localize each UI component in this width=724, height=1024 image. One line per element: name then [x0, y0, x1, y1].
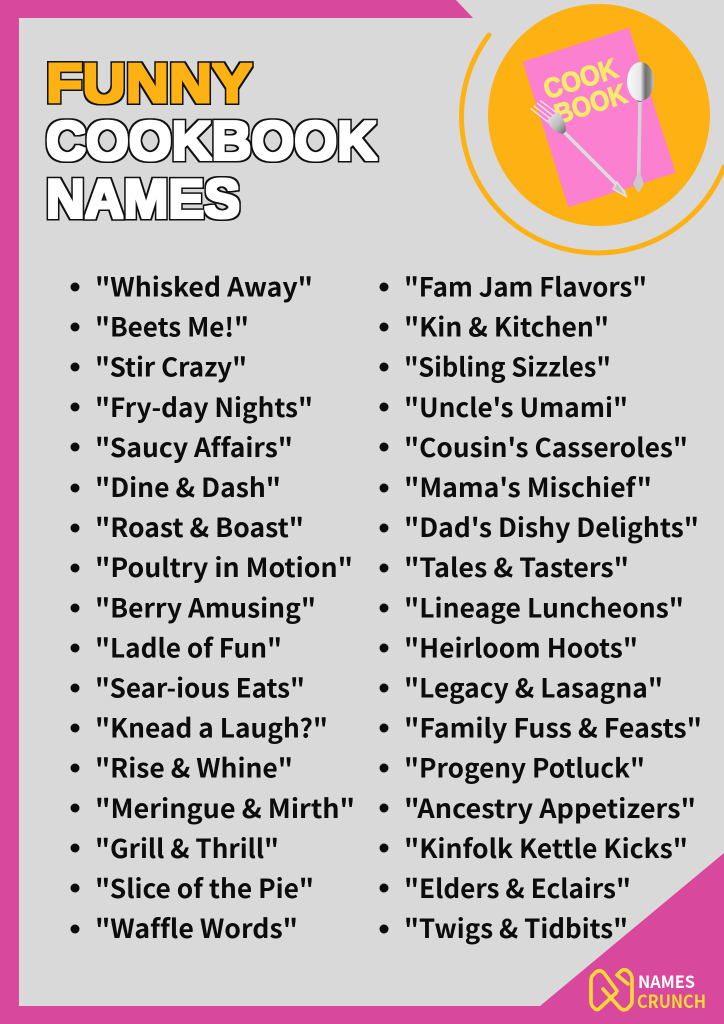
- item: "Ladle of Fun": [95, 628, 282, 665]
- orange circle: [488, 4, 710, 226]
- item: "Waffle Words": [95, 909, 298, 946]
- item: "Dad's Dishy Delights": [404, 508, 699, 545]
- item: "Heirloom Hoots": [404, 628, 638, 665]
- logo wordmark: Crunch: CRUNCH: [637, 988, 706, 1014]
- icon: N monogram: [591, 970, 632, 1010]
- title line: Funny: FUNNY: [46, 52, 252, 114]
- item: "Saucy Affairs": [95, 428, 293, 465]
- item: "Stir Crazy": [95, 348, 247, 385]
- icon: spoon: [627, 62, 654, 193]
- item: "Slice of the Pie": [95, 869, 314, 906]
- item: "Cousin's Casseroles": [404, 428, 688, 465]
- item: "Rise & Whine": [95, 749, 293, 786]
- item: "Tales & Tasters": [404, 548, 629, 585]
- orange ring arc: [462, 35, 724, 253]
- icon: cookbook illustration: [462, 4, 724, 253]
- item: "Fry-day Nights": [95, 388, 313, 425]
- item: "Sear-ious Eats": [95, 668, 305, 706]
- item: "Knead a Laugh?": [95, 709, 328, 746]
- list: left column: [70, 268, 355, 946]
- title line: Cookbook: COOKBOOK: [46, 110, 377, 172]
- item: "Whisked Away": [95, 268, 313, 304]
- item: "Ancestry Appetizers": [404, 789, 696, 826]
- item: "Beets Me!": [95, 308, 249, 345]
- logo wordmark: Names: NAMES: [638, 968, 695, 993]
- item: "Sibling Sizzles": [404, 348, 611, 385]
- item: "Kin & Kitchen": [404, 308, 609, 345]
- item: "Grill & Thrill": [95, 829, 279, 866]
- item: "Berry Amusing": [95, 588, 316, 625]
- list: right column: [380, 268, 702, 946]
- item: "Elders & Eclairs": [404, 869, 631, 906]
- book title: BOOK: [551, 78, 631, 130]
- book title: [540, 52, 631, 131]
- icon: fork: [531, 100, 627, 197]
- book title: COOK: [540, 52, 621, 105]
- item: "Roast & Boast": [95, 508, 304, 545]
- item: "Poultry in Motion": [95, 548, 353, 585]
- title line: Names: NAMES: [46, 168, 240, 230]
- item: "Dine & Dash": [95, 468, 281, 505]
- item: "Family Fuss & Feasts": [404, 709, 702, 746]
- title: [46, 52, 377, 230]
- item: "Twigs & Tidbits": [404, 909, 628, 946]
- item: "Uncle's Umami": [404, 388, 628, 425]
- logo: Names Crunch: [591, 968, 706, 1014]
- pink book: [523, 28, 676, 207]
- item: "Legacy & Lasagna": [404, 668, 663, 706]
- item: "Fam Jam Flavors": [404, 268, 647, 304]
- item: "Kinfolk Kettle Kicks": [404, 829, 688, 866]
- item: "Progeny Potluck": [404, 749, 645, 786]
- item: "Mama's Mischief": [404, 468, 652, 505]
- item: "Meringue & Mirth": [95, 789, 355, 826]
- item: "Lineage Luncheons": [404, 588, 684, 625]
